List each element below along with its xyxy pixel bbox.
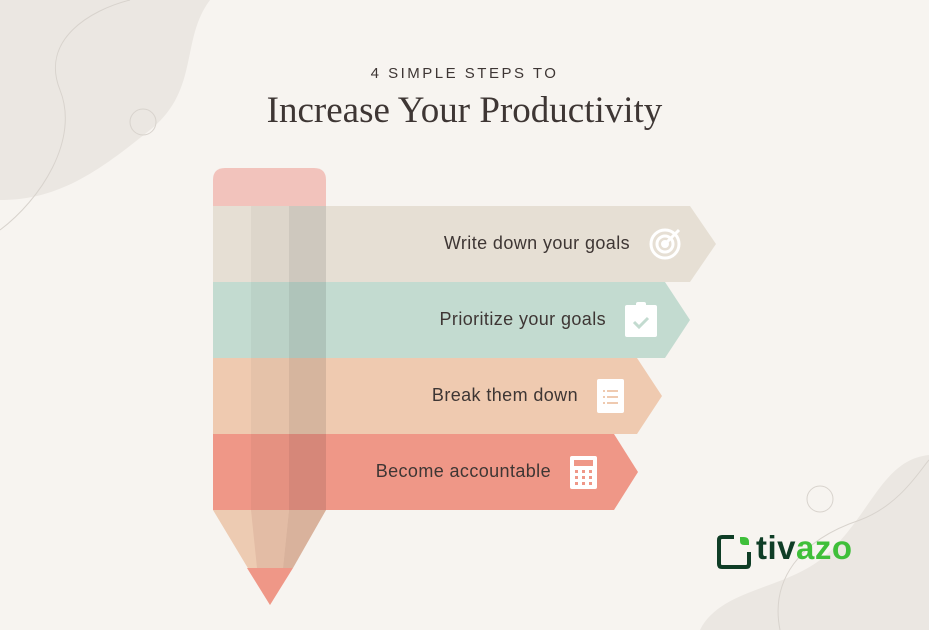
- icon: clipboard: [625, 302, 657, 337]
- band 2: [213, 282, 690, 358]
- band 4: [213, 434, 638, 510]
- icon: document list: [597, 379, 624, 413]
- title: 4 SIMPLE STEPS TO: [371, 65, 558, 82]
- icon: calculator: [570, 456, 597, 489]
- step 1 text: Write down your goals: [444, 233, 630, 253]
- title: Increase Your Productivity: [267, 90, 662, 131]
- band 1: [213, 206, 716, 282]
- step 3 text: Break them down: [432, 385, 578, 405]
- step 2 text: Prioritize your goals: [440, 309, 606, 329]
- logo: tivazo: [756, 529, 853, 566]
- pencil cap: [213, 168, 326, 206]
- band 3: [213, 358, 662, 434]
- pencil cone: [213, 510, 326, 605]
- logo: [717, 529, 853, 569]
- step 4 text: Become accountable: [376, 461, 551, 481]
- icon: target: [651, 230, 679, 258]
- title: [267, 65, 662, 131]
